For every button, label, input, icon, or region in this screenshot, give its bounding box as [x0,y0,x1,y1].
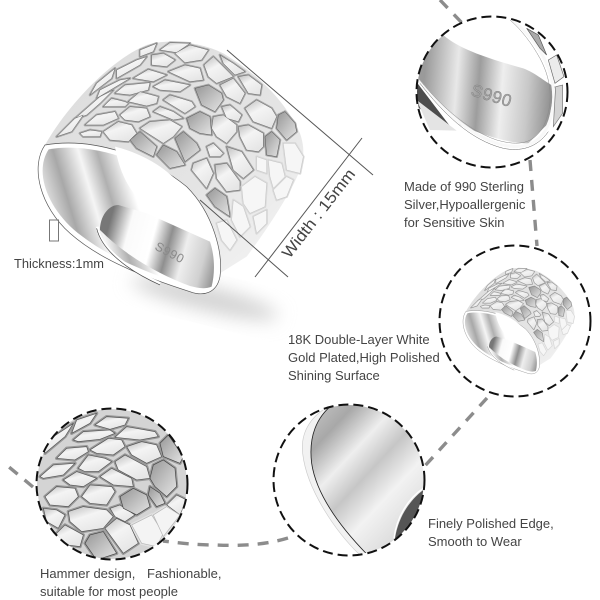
caption: sterling silver: Made of 990 Sterling [404,179,524,194]
width dimension lines [200,50,373,277]
main hammered ring photo [38,42,303,294]
caption: white gold plating: Gold Plated,High Polished [288,350,440,365]
S990 engraving: S990 [469,81,514,111]
caption: sterling silver: Silver,Hypoallergenic [404,197,526,212]
thickness label: Thickness:1mm [14,257,104,271]
caption: polished edge: Finely Polished Edge, [428,516,554,531]
width label: Width : 15mm [279,166,359,262]
caption: hammer design: suitable for most people [40,584,178,599]
caption: sterling silver: for Sensitive Skin [404,215,504,230]
dashed border 3 [274,404,424,556]
connector: circle 1 to circle 2 [530,160,537,246]
circle 2: whole ring [440,246,590,396]
ring shadow [129,268,281,328]
caption: polished edge: Smooth to Wear [428,534,522,549]
thickness marker [50,220,58,241]
circle 4: hammer texture [33,407,190,563]
S990 stamp on main ring: S990 [153,239,187,266]
circle 3: polished edge [274,403,430,557]
dashed border 2 [440,246,590,396]
connector: circle 2 to circle 3 [423,398,487,468]
connector: top into circle 1 [440,0,463,24]
circle 1: S990 stamp detail [413,16,568,168]
caption: hammer design: Fashionable, [147,566,221,581]
caption: hammer design: Hammer design, [40,566,135,581]
dashed border 4 [36,408,188,560]
caption: white gold plating: 18K Double-Layer White [288,332,430,347]
caption: white gold plating: Shining Surface [288,368,380,383]
dashed border 1 [416,16,568,168]
connector: circle 3 to circle 4 [163,538,288,545]
connector: circle 4 leftward [9,467,33,487]
